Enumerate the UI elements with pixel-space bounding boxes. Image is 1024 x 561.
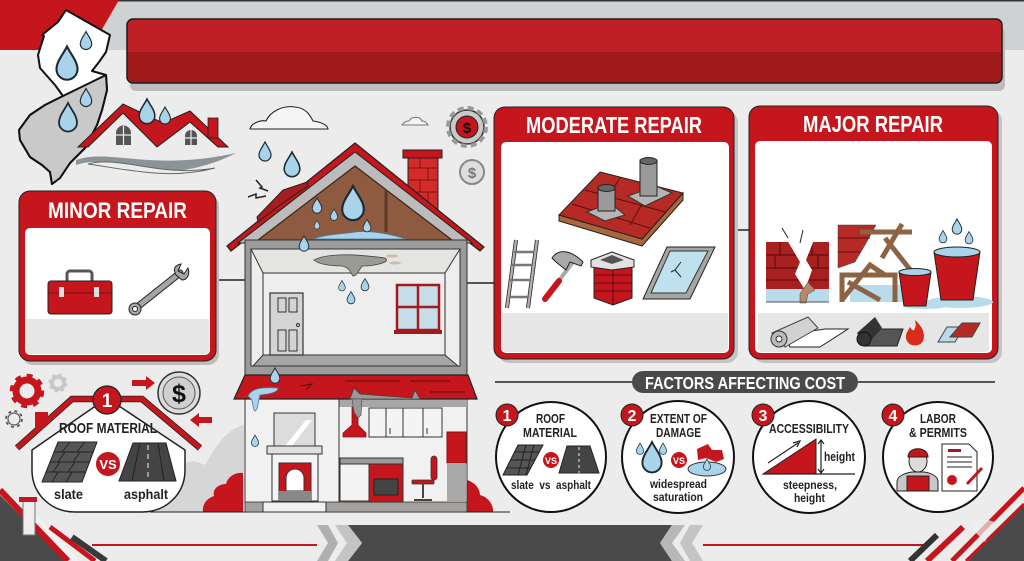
vs: VS bbox=[545, 456, 557, 466]
heading: DAMAGE bbox=[656, 425, 701, 440]
badge: 2 bbox=[628, 408, 637, 425]
label: slate vs asphalt bbox=[511, 478, 591, 492]
heading: EXTENT OF bbox=[650, 411, 707, 426]
label: steepness, bbox=[783, 478, 837, 492]
label: saturation bbox=[653, 490, 703, 504]
badge: 4 bbox=[889, 408, 898, 425]
callout: roof material bbox=[17, 386, 200, 512]
icon: worker bbox=[897, 449, 938, 491]
icon: cracked roof bbox=[766, 228, 829, 303]
badge: 3 bbox=[759, 408, 768, 425]
label: height bbox=[794, 491, 825, 505]
ceiling stain bbox=[314, 255, 387, 276]
icon: broken rafters bbox=[838, 224, 912, 302]
icon: hammer bbox=[545, 252, 583, 299]
vs: VS bbox=[99, 457, 117, 472]
icons: gear and dollar bbox=[448, 108, 486, 184]
icon: saturation splash bbox=[688, 444, 726, 476]
red roof outline bbox=[17, 399, 200, 448]
heading bbox=[909, 411, 967, 440]
lower floor bbox=[245, 399, 467, 503]
heading: ACCESSIBILITY bbox=[769, 421, 849, 436]
icons: gear and dollar: $ bbox=[468, 165, 477, 182]
heading: MAJOR REPAIR bbox=[803, 111, 943, 137]
roof bbox=[227, 143, 484, 251]
heading: MINOR REPAIR bbox=[48, 198, 187, 223]
drops above the house bbox=[248, 142, 300, 198]
icon: toolbox bbox=[48, 271, 112, 314]
logo house with waves bbox=[76, 99, 236, 174]
damaged shingles bbox=[257, 182, 308, 222]
right corner roof bbox=[968, 505, 1024, 561]
number badge: 1 bbox=[102, 391, 113, 412]
fireplace bbox=[263, 413, 326, 512]
heading: & PERMITS bbox=[909, 425, 967, 440]
factors heading: FACTORS AFFECTING COST bbox=[645, 373, 845, 393]
heading bbox=[650, 411, 707, 440]
icon: slope diagram: height bbox=[824, 450, 856, 464]
heading: LABOR bbox=[920, 411, 956, 426]
icon: cracked skylight bbox=[643, 247, 715, 299]
left corner roof bbox=[0, 495, 66, 561]
icon: tar roll bbox=[857, 317, 903, 347]
door bbox=[270, 293, 303, 355]
icon: coin with arrows bbox=[132, 372, 212, 427]
panel: moderate repair bbox=[494, 107, 738, 363]
icon: permit document bbox=[942, 444, 982, 491]
icon: tile patches bbox=[938, 323, 980, 342]
chimney bbox=[403, 150, 442, 212]
icon: wrench bbox=[129, 264, 189, 315]
icon: water buckets bbox=[899, 219, 993, 309]
vs bbox=[96, 452, 120, 476]
heading bbox=[523, 411, 577, 440]
number badge bbox=[93, 386, 121, 414]
icon: slate bbox=[42, 442, 97, 482]
ground scenery bbox=[150, 425, 510, 512]
heading: ROOF MATERIAL bbox=[59, 420, 157, 437]
factor 4: labor and permits bbox=[882, 402, 993, 512]
vs: VS bbox=[673, 456, 685, 466]
icon: drops bbox=[636, 442, 667, 472]
panel: minor repair bbox=[19, 191, 219, 365]
window bbox=[394, 285, 442, 334]
title banner bbox=[127, 19, 1005, 91]
labels: slate bbox=[54, 486, 83, 502]
icon: ladder bbox=[507, 240, 537, 308]
clouds bbox=[250, 107, 428, 129]
icon: brick chimney bbox=[591, 252, 634, 305]
label: widespread bbox=[649, 477, 707, 491]
icons: gears bbox=[6, 374, 66, 427]
icon: membrane roll bbox=[771, 317, 848, 347]
icons: gear and dollar: $ bbox=[463, 120, 472, 137]
icon: flame bbox=[906, 320, 924, 346]
icon: slate bbox=[503, 445, 543, 475]
factor 1: roof material bbox=[496, 402, 606, 512]
badge: 1 bbox=[503, 408, 512, 425]
main house cutaway bbox=[227, 143, 484, 512]
label bbox=[649, 477, 707, 504]
porch roof bbox=[234, 368, 477, 418]
heading: MATERIAL bbox=[523, 425, 577, 440]
heading: MODERATE REPAIR bbox=[526, 112, 702, 138]
red corner accent bbox=[0, 0, 119, 50]
factor 3: accessibility bbox=[752, 401, 865, 513]
attic water bbox=[312, 186, 406, 239]
icon: asphalt bbox=[119, 443, 176, 481]
factors heading bbox=[495, 371, 995, 393]
panel: major repair bbox=[749, 106, 1002, 363]
icon: coin with arrows: $ bbox=[172, 380, 186, 408]
callout: roof material: asphalt bbox=[124, 486, 168, 502]
New Jersey map with drops bbox=[19, 10, 110, 184]
kitchen bbox=[340, 407, 466, 502]
bottom band bbox=[0, 488, 1024, 561]
icon: roof section with pipes bbox=[559, 158, 683, 246]
factor 2: extent of damage bbox=[621, 401, 734, 513]
connector lines bbox=[216, 230, 749, 283]
label bbox=[783, 478, 837, 505]
heading: ROOF bbox=[536, 411, 565, 426]
icon: asphalt bbox=[559, 446, 599, 473]
upper floor walls bbox=[245, 240, 467, 375]
